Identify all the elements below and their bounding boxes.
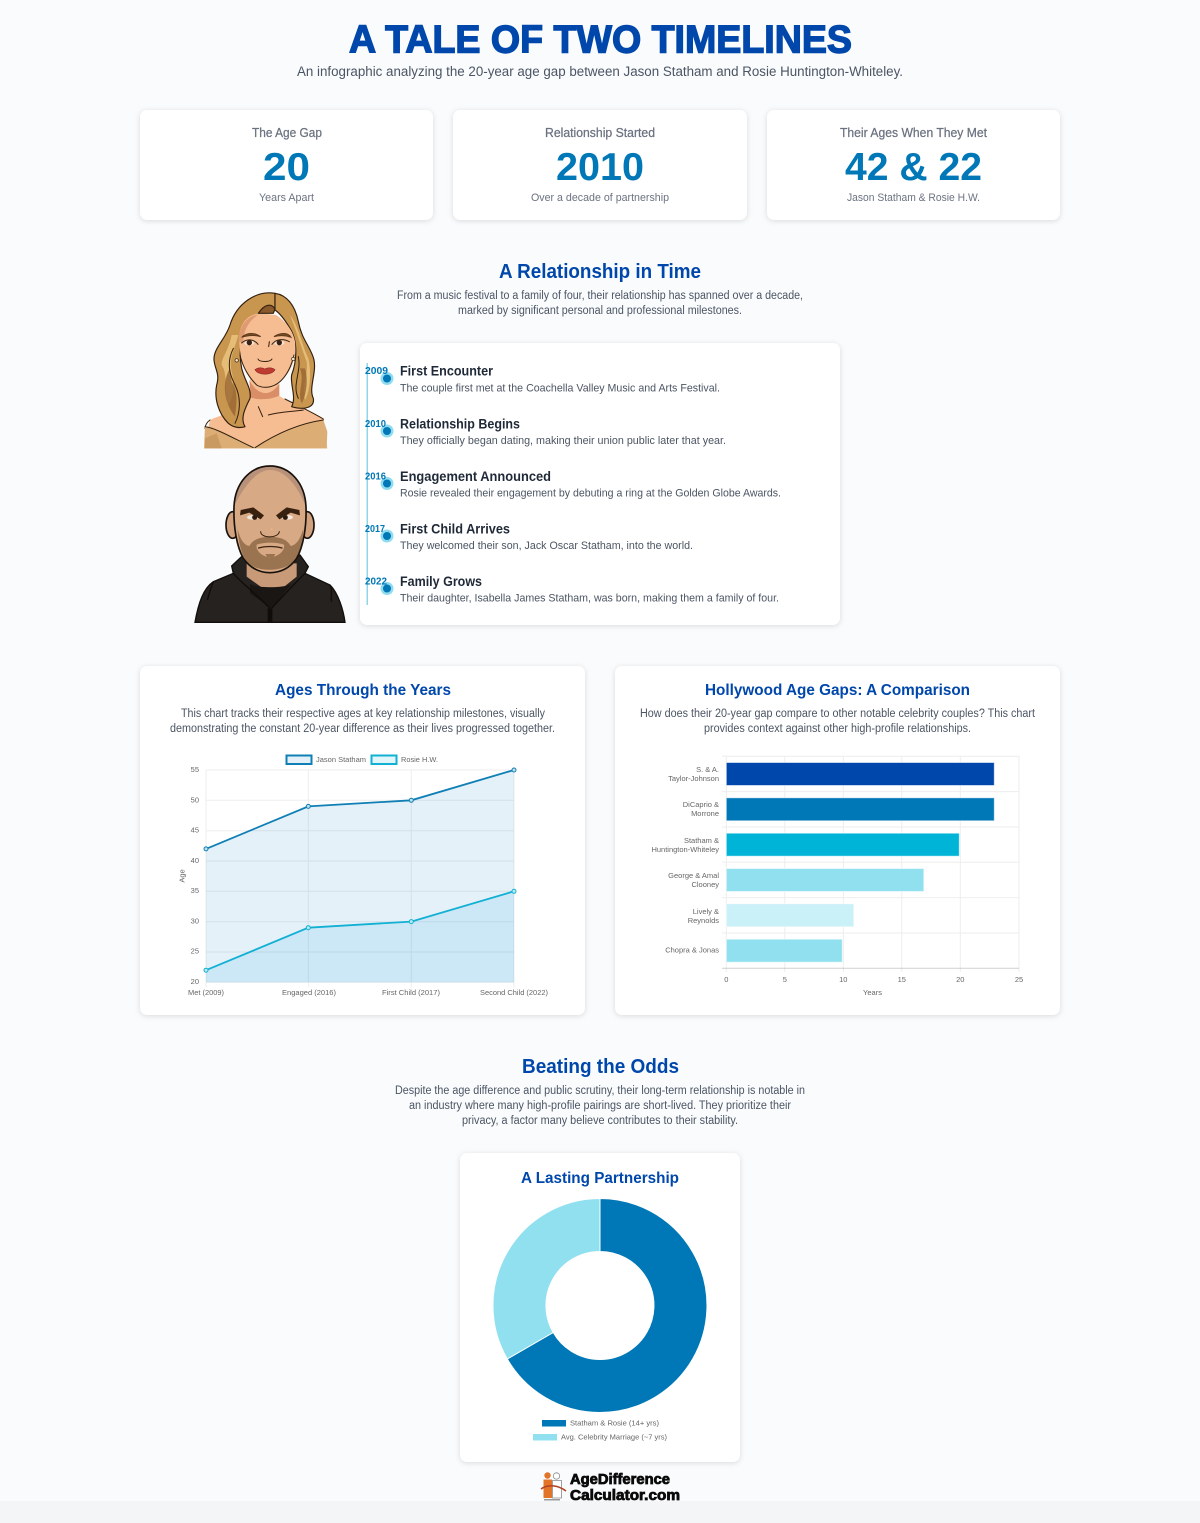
y axis title: Age <box>178 869 186 883</box>
icon: couple <box>541 1472 566 1500</box>
stat card: age gap: Years Apart <box>259 192 314 204</box>
y axis: 35 <box>191 886 199 895</box>
stat card: relationship started: Over a decade of partnership <box>531 192 669 204</box>
timeline line <box>366 363 368 605</box>
milestone 2017: 2017 <box>365 524 385 535</box>
milestone 2016: 2016 <box>365 472 386 482</box>
portrait: Jason Statham <box>195 466 345 622</box>
intro text: beating the odds: privacy, a factor many believe contributes to their stability. <box>462 1115 738 1127</box>
value axis: 5 <box>783 975 787 984</box>
milestone 2022 <box>365 574 779 604</box>
stat card: ages when met <box>767 110 1060 220</box>
milestone 2022: 2022 <box>365 576 387 588</box>
heading: beating the odds: Beating the Odds <box>522 1056 679 1078</box>
area: Rosie <box>206 891 514 982</box>
stat card: age gap <box>140 110 433 220</box>
stat card: ages when met: Jason Statham & Rosie H.W. <box>847 192 980 204</box>
chart description: demonstrating the constant 20-year difference as their lives progressed together. <box>170 723 555 735</box>
value axis: 10 <box>839 975 847 984</box>
line: Jason Statham <box>204 768 516 851</box>
y axis: 45 <box>191 826 199 834</box>
intro text: beating the odds: Despite the age difference and public scrutiny, their long-term relationship is notable in <box>395 1085 805 1097</box>
intro text: beating the odds <box>395 1085 805 1127</box>
wordmark: Calculator.com <box>570 1488 680 1504</box>
stat card: age gap: 20 <box>263 146 310 189</box>
milestone 2010: 2010 <box>365 419 386 430</box>
panel: a lasting partnership <box>460 1153 740 1462</box>
milestone 2009: 2009 <box>365 366 388 377</box>
category labels: S. & A. <box>696 765 719 774</box>
stat card: relationship started: 2010 <box>556 146 644 189</box>
milestone 2010 <box>365 416 726 447</box>
chart heading: Hollywood Age Gaps: A Comparison <box>705 682 970 699</box>
panel: ages through the years <box>140 666 585 1015</box>
panel heading: A Lasting Partnership <box>521 1170 679 1187</box>
area: Jason <box>206 770 514 982</box>
legend: Rosie H.W. <box>401 755 438 764</box>
heading: a relationship in time: A Relationship in Time <box>499 261 701 283</box>
category labels: Lively & <box>693 907 719 916</box>
intro text: relationship: marked by significant personal and professional milestones. <box>458 305 742 317</box>
milestone 2016: Engagement Announced <box>400 469 551 484</box>
milestone 2016: Rosie revealed their engagement by debuting a ring at the Golden Globe Awards. <box>400 488 781 500</box>
x axis: Engaged (2016) <box>282 988 337 997</box>
title: A TALE OF TWO TIMELINES <box>349 18 852 62</box>
category labels: Clooney <box>691 880 719 889</box>
footer band <box>0 1501 1200 1523</box>
segment: Statham and Rosie <box>507 1198 707 1412</box>
category labels: Statham & <box>684 836 719 845</box>
y axis: 40 <box>191 856 199 865</box>
category labels: Taylor-Johnson <box>668 774 719 783</box>
y axis: 25 <box>191 946 199 956</box>
value axis: 20 <box>956 975 964 984</box>
stat card: relationship started <box>453 110 747 220</box>
intro text: relationship: From a music festival to a family of four, their relationship has spanned over a decade, <box>397 290 803 302</box>
y axis: 55 <box>191 765 199 774</box>
chart description <box>170 708 555 735</box>
category labels: George & Amal <box>668 871 719 880</box>
value axis: Years <box>863 988 882 997</box>
category labels: Huntington-Whiteley <box>651 845 719 854</box>
x axis: First Child (2017) <box>382 988 440 997</box>
milestone 2017 <box>365 522 693 552</box>
y axis: 20 <box>191 977 199 986</box>
stat card: ages when met: 42 & 22 <box>845 146 982 189</box>
panel: hollywood age gaps <box>615 666 1060 1015</box>
donut legend: Statham & Rosie (14+ yrs) <box>570 1418 659 1428</box>
milestone 2009: First Encounter <box>400 364 494 378</box>
legend <box>286 755 438 764</box>
bars <box>726 762 994 962</box>
milestone 2016 <box>365 469 781 500</box>
intro text: relationship <box>397 290 803 317</box>
intro text: beating the odds: an industry where many high-profile pairings are short-lived. They prioritize their <box>409 1100 791 1112</box>
y axis: 30 <box>191 916 199 926</box>
chart heading: Ages Through the Years <box>275 682 451 699</box>
x axis: Met (2009) <box>188 988 224 997</box>
bar chart <box>651 756 1023 997</box>
stat card: ages when met: Their Ages When They Met <box>840 126 988 140</box>
y axis: 50 <box>191 796 199 804</box>
subtitle: An infographic analyzing the 20-year age gap between Jason Statham and Rosie Huntington-Whiteley. <box>297 64 903 79</box>
donut chart <box>493 1198 707 1412</box>
milestone 2010: Relationship Begins <box>400 416 520 432</box>
donut legend <box>533 1418 668 1442</box>
milestone 2022: Family Grows <box>400 574 482 589</box>
category labels: DiCaprio & <box>683 800 719 809</box>
portrait: Rosie Huntington-Whiteley <box>204 293 327 448</box>
category labels <box>651 765 719 954</box>
milestone 2009: The couple first met at the Coachella Valley Music and Arts Festival. <box>400 382 720 394</box>
value axis: 15 <box>898 975 906 984</box>
milestone 2010: They officially began dating, making their union public later that year. <box>400 435 726 447</box>
wordmark: AgeDifference <box>570 1472 670 1488</box>
category labels: Chopra & Jonas <box>665 946 719 954</box>
milestone 2009 <box>365 364 720 394</box>
segment: average celebrity marriage <box>493 1198 600 1359</box>
donut legend: Avg. Celebrity Marriage (~7 yrs) <box>561 1432 668 1442</box>
line chart <box>178 755 548 997</box>
chart description: This chart tracks their respective ages at key relationship milestones, visually <box>181 708 545 720</box>
milestone 2022: Their daughter, Isabella James Statham, was born, making them a family of four. <box>400 592 779 604</box>
x axis: Second Child (2022) <box>480 988 548 997</box>
value axis: 25 <box>1015 975 1023 984</box>
panel: timeline <box>360 343 840 625</box>
milestone 2017: First Child Arrives <box>400 522 510 536</box>
category labels: Reynolds <box>688 916 719 925</box>
value axis <box>724 975 1023 997</box>
stat card: age gap: The Age Gap <box>252 126 322 140</box>
legend: Jason Statham <box>316 755 366 764</box>
category labels: Morrone <box>691 809 719 818</box>
value axis: 0 <box>724 975 728 984</box>
x axis <box>188 988 548 997</box>
stat card: relationship started: Relationship Started <box>545 126 655 140</box>
chart description: How does their 20-year gap compare to other notable celebrity couples? This chart <box>640 708 1036 720</box>
y axis <box>191 765 199 986</box>
chart description <box>640 708 1036 735</box>
wordmark <box>570 1472 680 1504</box>
milestone 2017: They welcomed their son, Jack Oscar Statham, into the world. <box>400 540 693 552</box>
logo <box>541 1472 680 1504</box>
chart description: provides context against other high-profile relationships. <box>704 723 971 735</box>
line: Rosie H.W. <box>204 889 516 972</box>
